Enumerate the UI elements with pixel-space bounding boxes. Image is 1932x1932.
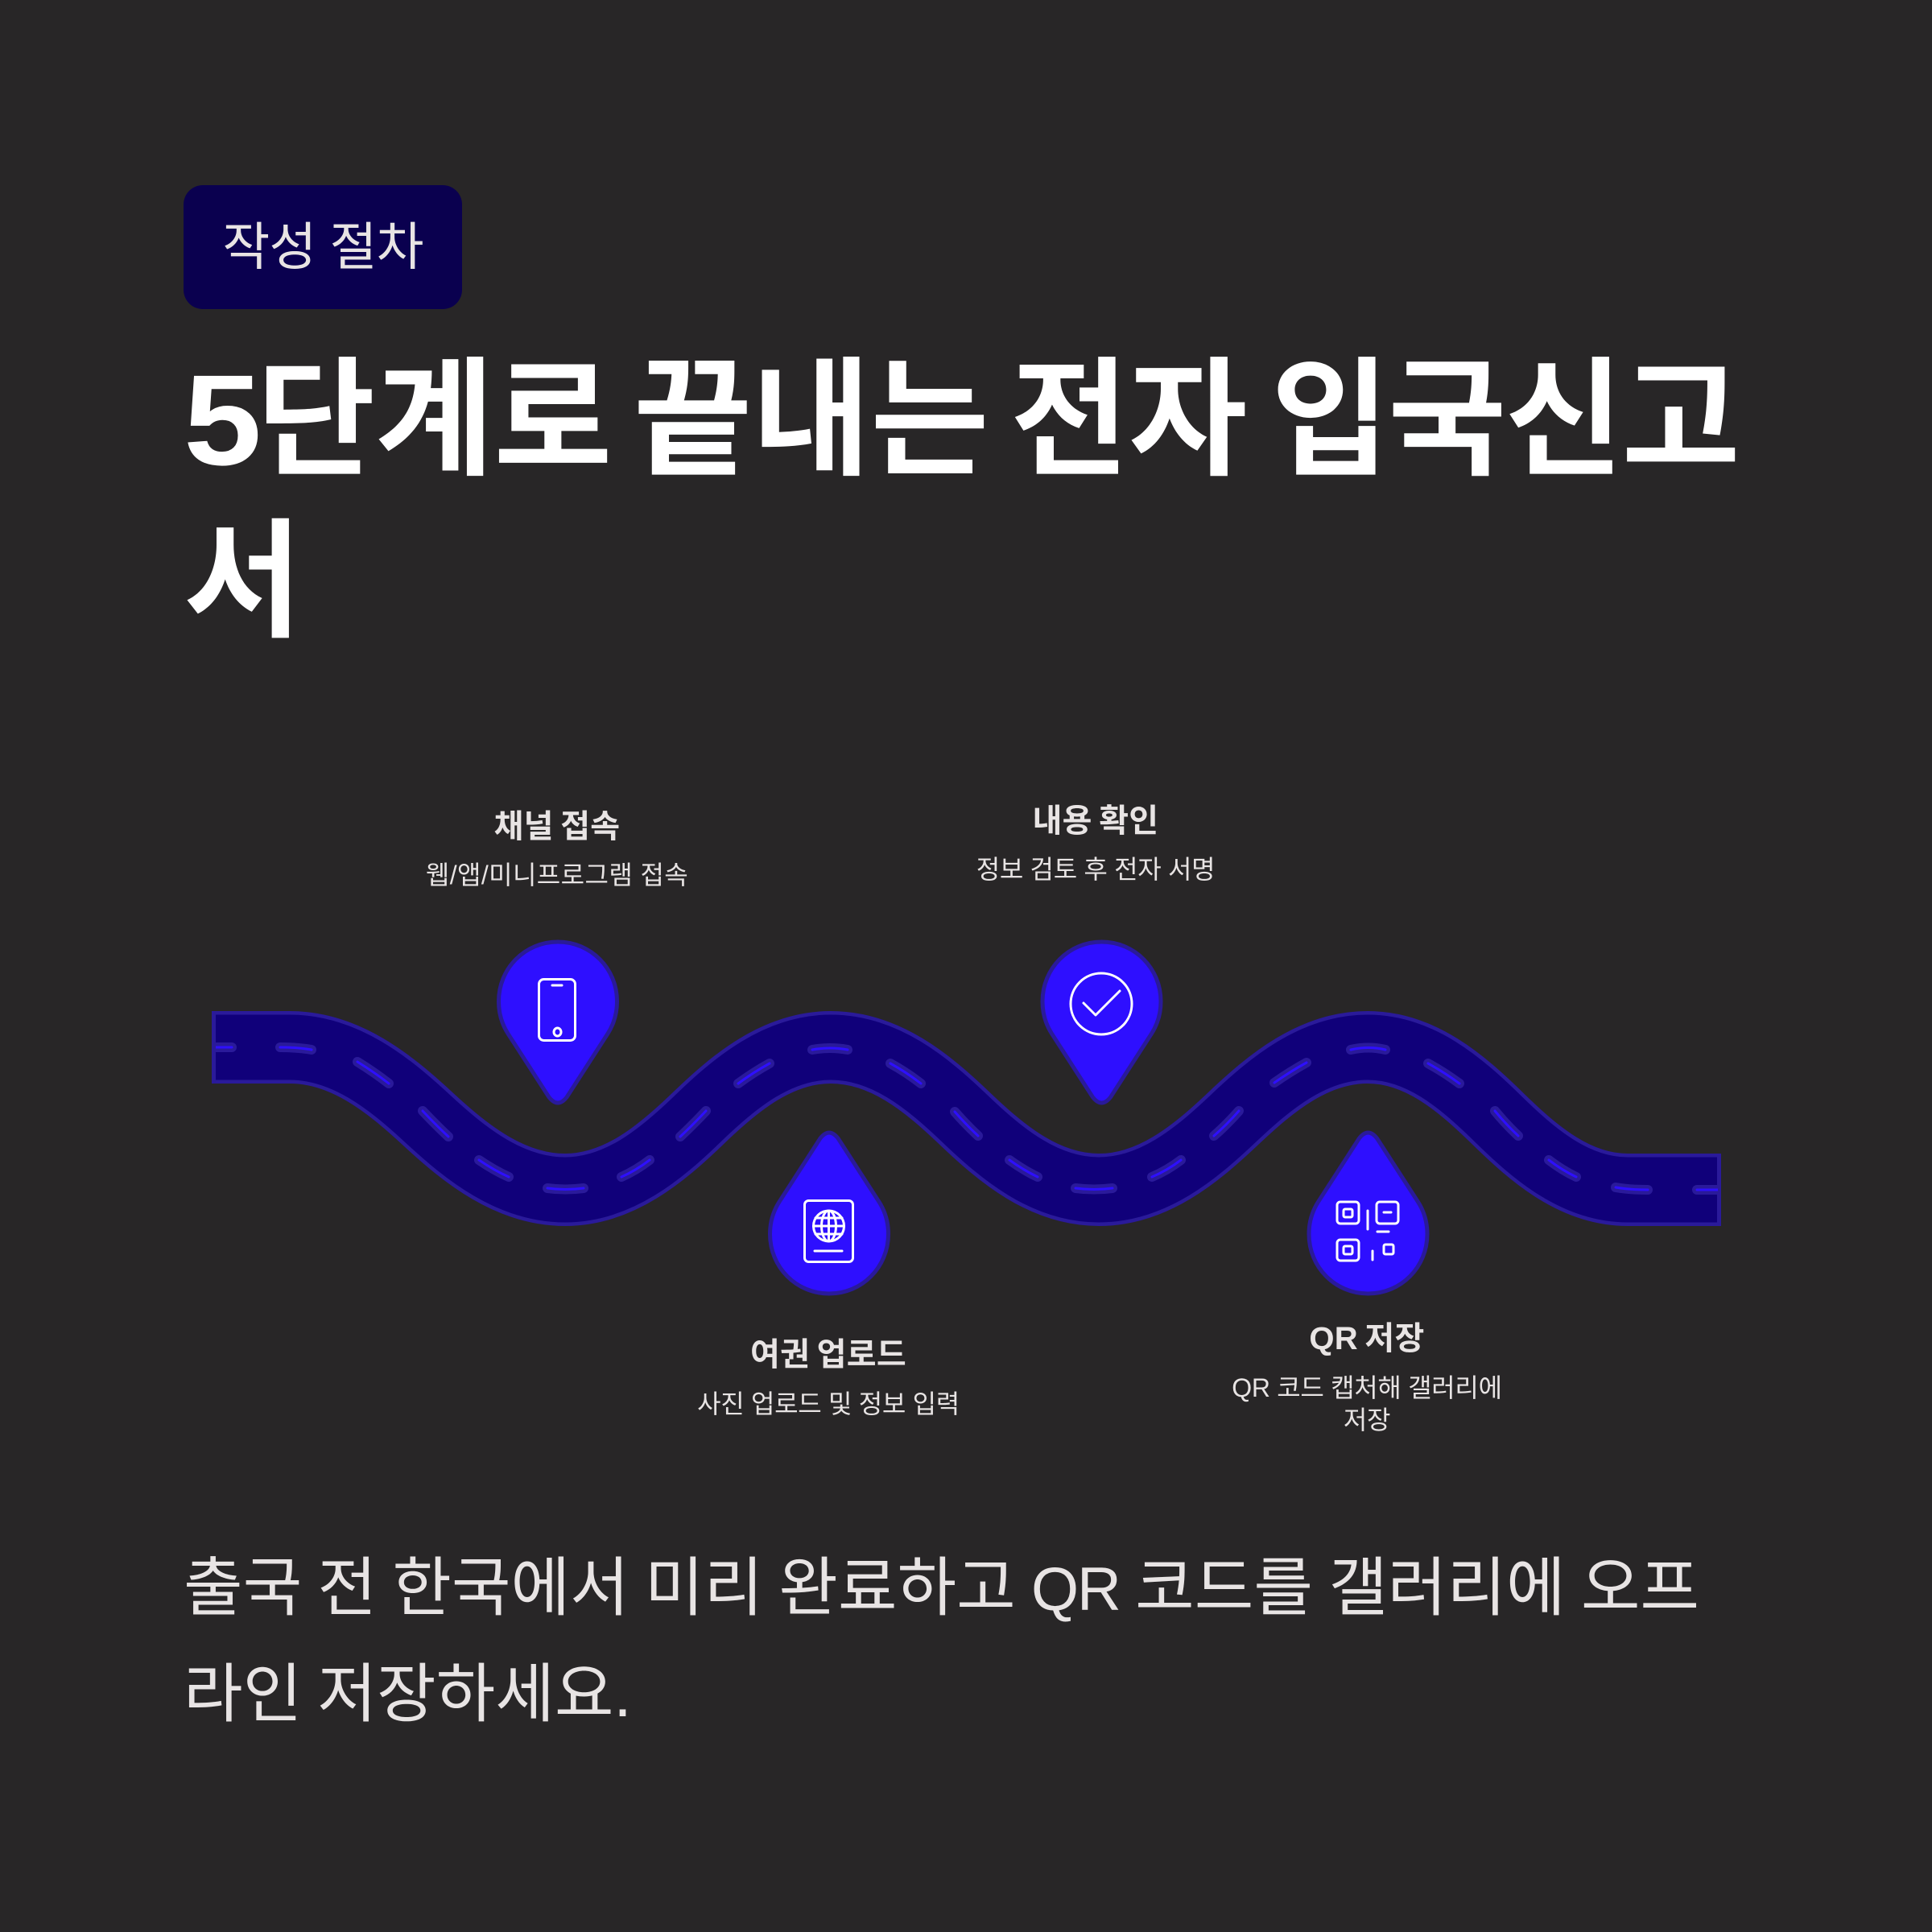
step description (1232, 1373, 1502, 1435)
step description: QR 코드 캡처해 갤러리에 (1232, 1373, 1502, 1402)
pin: QR 저장 qr code (1309, 1133, 1427, 1294)
step heading: 채널 접속 (494, 809, 620, 844)
step label: 여권 업로드 (697, 1337, 960, 1418)
winding road (212, 1047, 1723, 1190)
step heading: QR 저장 (1309, 1321, 1425, 1356)
icon: check circle (1071, 973, 1132, 1034)
title: 서 (184, 510, 302, 654)
step label: QR 저장 (1232, 1321, 1502, 1435)
step label: 내용 확인 (976, 803, 1215, 884)
step heading: 내용 확인 (1033, 803, 1158, 839)
icon: phone (539, 979, 575, 1040)
step description: 정보 검토 후 전자 서명 (976, 855, 1215, 884)
title: 5 (184, 348, 263, 492)
step description: 웹/앱/미니프로그램 접속 (426, 861, 688, 890)
icon: qr code (1337, 1202, 1398, 1261)
step description: 저장 (1344, 1406, 1390, 1435)
road map diagram (212, 940, 1721, 1296)
pin: 여권 업로드 passport (770, 1133, 889, 1294)
step description: 사진 업로드 및 정보 입력 (697, 1389, 960, 1418)
description text (184, 1552, 1699, 1730)
badge: 작성 절차: 작성 절차 (222, 218, 423, 276)
step label: 채널 접속 (426, 809, 688, 890)
icon: passport (805, 1201, 853, 1262)
description text: 라인 저장하세요. (184, 1658, 632, 1730)
badge: 작성 절차 (184, 185, 462, 309)
description text: 출국 전 한국에서 미리 완료하고 QR 코드를 갤러리에 오프 (184, 1552, 1699, 1624)
title (184, 348, 1739, 654)
step heading: 여권 업로드 (750, 1337, 906, 1373)
title: 단계로 끝내는 전자 입국신고 (257, 348, 1739, 492)
pin: 채널 접속 phone (499, 942, 617, 1103)
pin: 내용 확인 check (1042, 942, 1161, 1103)
